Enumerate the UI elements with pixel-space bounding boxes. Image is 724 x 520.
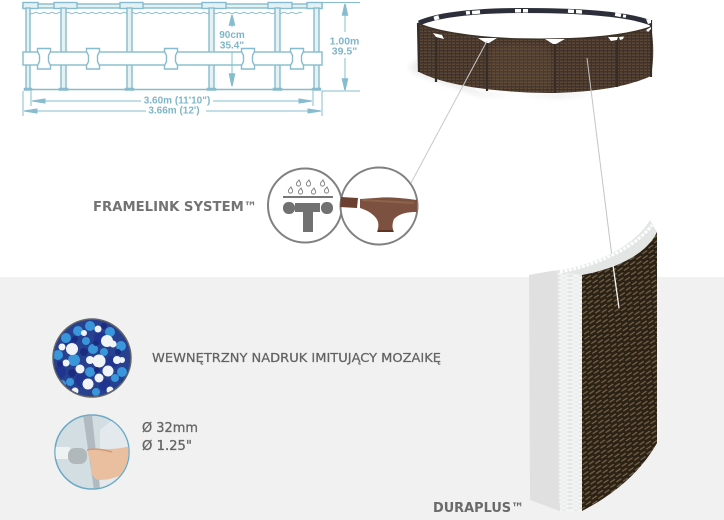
1.00m dimension bbox=[322, 2, 360, 91]
pointer line to duraplus bbox=[587, 58, 613, 265]
label: mosaic print: WEWNĘTRZNY NADRUK IMITUJĄCY MOZAIKĘ bbox=[152, 350, 441, 365]
ground shadow bbox=[408, 58, 650, 98]
far rim bbox=[419, 10, 651, 23]
mesh layer bbox=[558, 273, 583, 511]
posts bbox=[26, 8, 319, 89]
hand bbox=[87, 446, 130, 480]
water line bbox=[30, 12, 302, 14]
top mesh strip bbox=[555, 220, 657, 275]
label: duraplus: DURAPLUS™ bbox=[433, 501, 524, 516]
label: diameter bbox=[142, 421, 198, 454]
frame pole bbox=[83, 415, 100, 490]
dimension labels: 3.66m (12') bbox=[148, 106, 200, 116]
T connector bbox=[283, 202, 333, 232]
icon: framelink photo bbox=[340, 168, 418, 244]
dimension labels: 35.4" bbox=[220, 40, 244, 52]
dimension labels: 3.60m (11'10") bbox=[144, 96, 210, 106]
belt connectors bbox=[38, 48, 304, 69]
roof bar bbox=[283, 196, 333, 198]
pool photo bbox=[408, 9, 653, 98]
white rim joints bbox=[433, 9, 651, 44]
rim edge bbox=[418, 23, 651, 39]
pointer line on panel bbox=[613, 265, 619, 308]
top rim bbox=[23, 2, 322, 8]
lighter wall bbox=[100, 421, 128, 488]
valve bbox=[55, 447, 70, 459]
label: diameter: Ø 32mm bbox=[142, 421, 198, 436]
wall shading bbox=[489, 44, 554, 88]
wicker wall bbox=[418, 23, 653, 93]
icon: framelink diagram bbox=[268, 168, 342, 242]
dimension labels: 39.5" bbox=[332, 46, 357, 58]
wicker layer bbox=[582, 232, 657, 511]
bottom line bbox=[24, 88, 321, 90]
90cm dimension bbox=[230, 15, 234, 86]
panel: duraplus layers bbox=[529, 220, 657, 511]
upright posts bbox=[418, 20, 651, 93]
dimension labels: 1.00m bbox=[330, 36, 359, 48]
back grey layer bbox=[529, 270, 560, 511]
dimension labels: 90cm bbox=[219, 30, 245, 41]
framelink label: FRAMELINK SYSTEM™ bbox=[93, 200, 257, 215]
belt bbox=[23, 52, 322, 65]
label: diameter: Ø 1.25" bbox=[142, 439, 192, 454]
width dimensions bbox=[23, 91, 322, 116]
water drops bbox=[288, 180, 329, 194]
icon: frame diameter photo bbox=[54, 414, 130, 490]
post feet bbox=[24, 88, 321, 90]
icon: mosaic swatch bbox=[53, 319, 131, 397]
loose pipe bbox=[340, 197, 358, 208]
blueprint diagram bbox=[23, 2, 360, 116]
T piece bbox=[360, 197, 417, 232]
pointer line to framelink bbox=[411, 41, 487, 183]
panel: lower grey background bbox=[0, 277, 724, 520]
dimension labels bbox=[144, 30, 359, 116]
